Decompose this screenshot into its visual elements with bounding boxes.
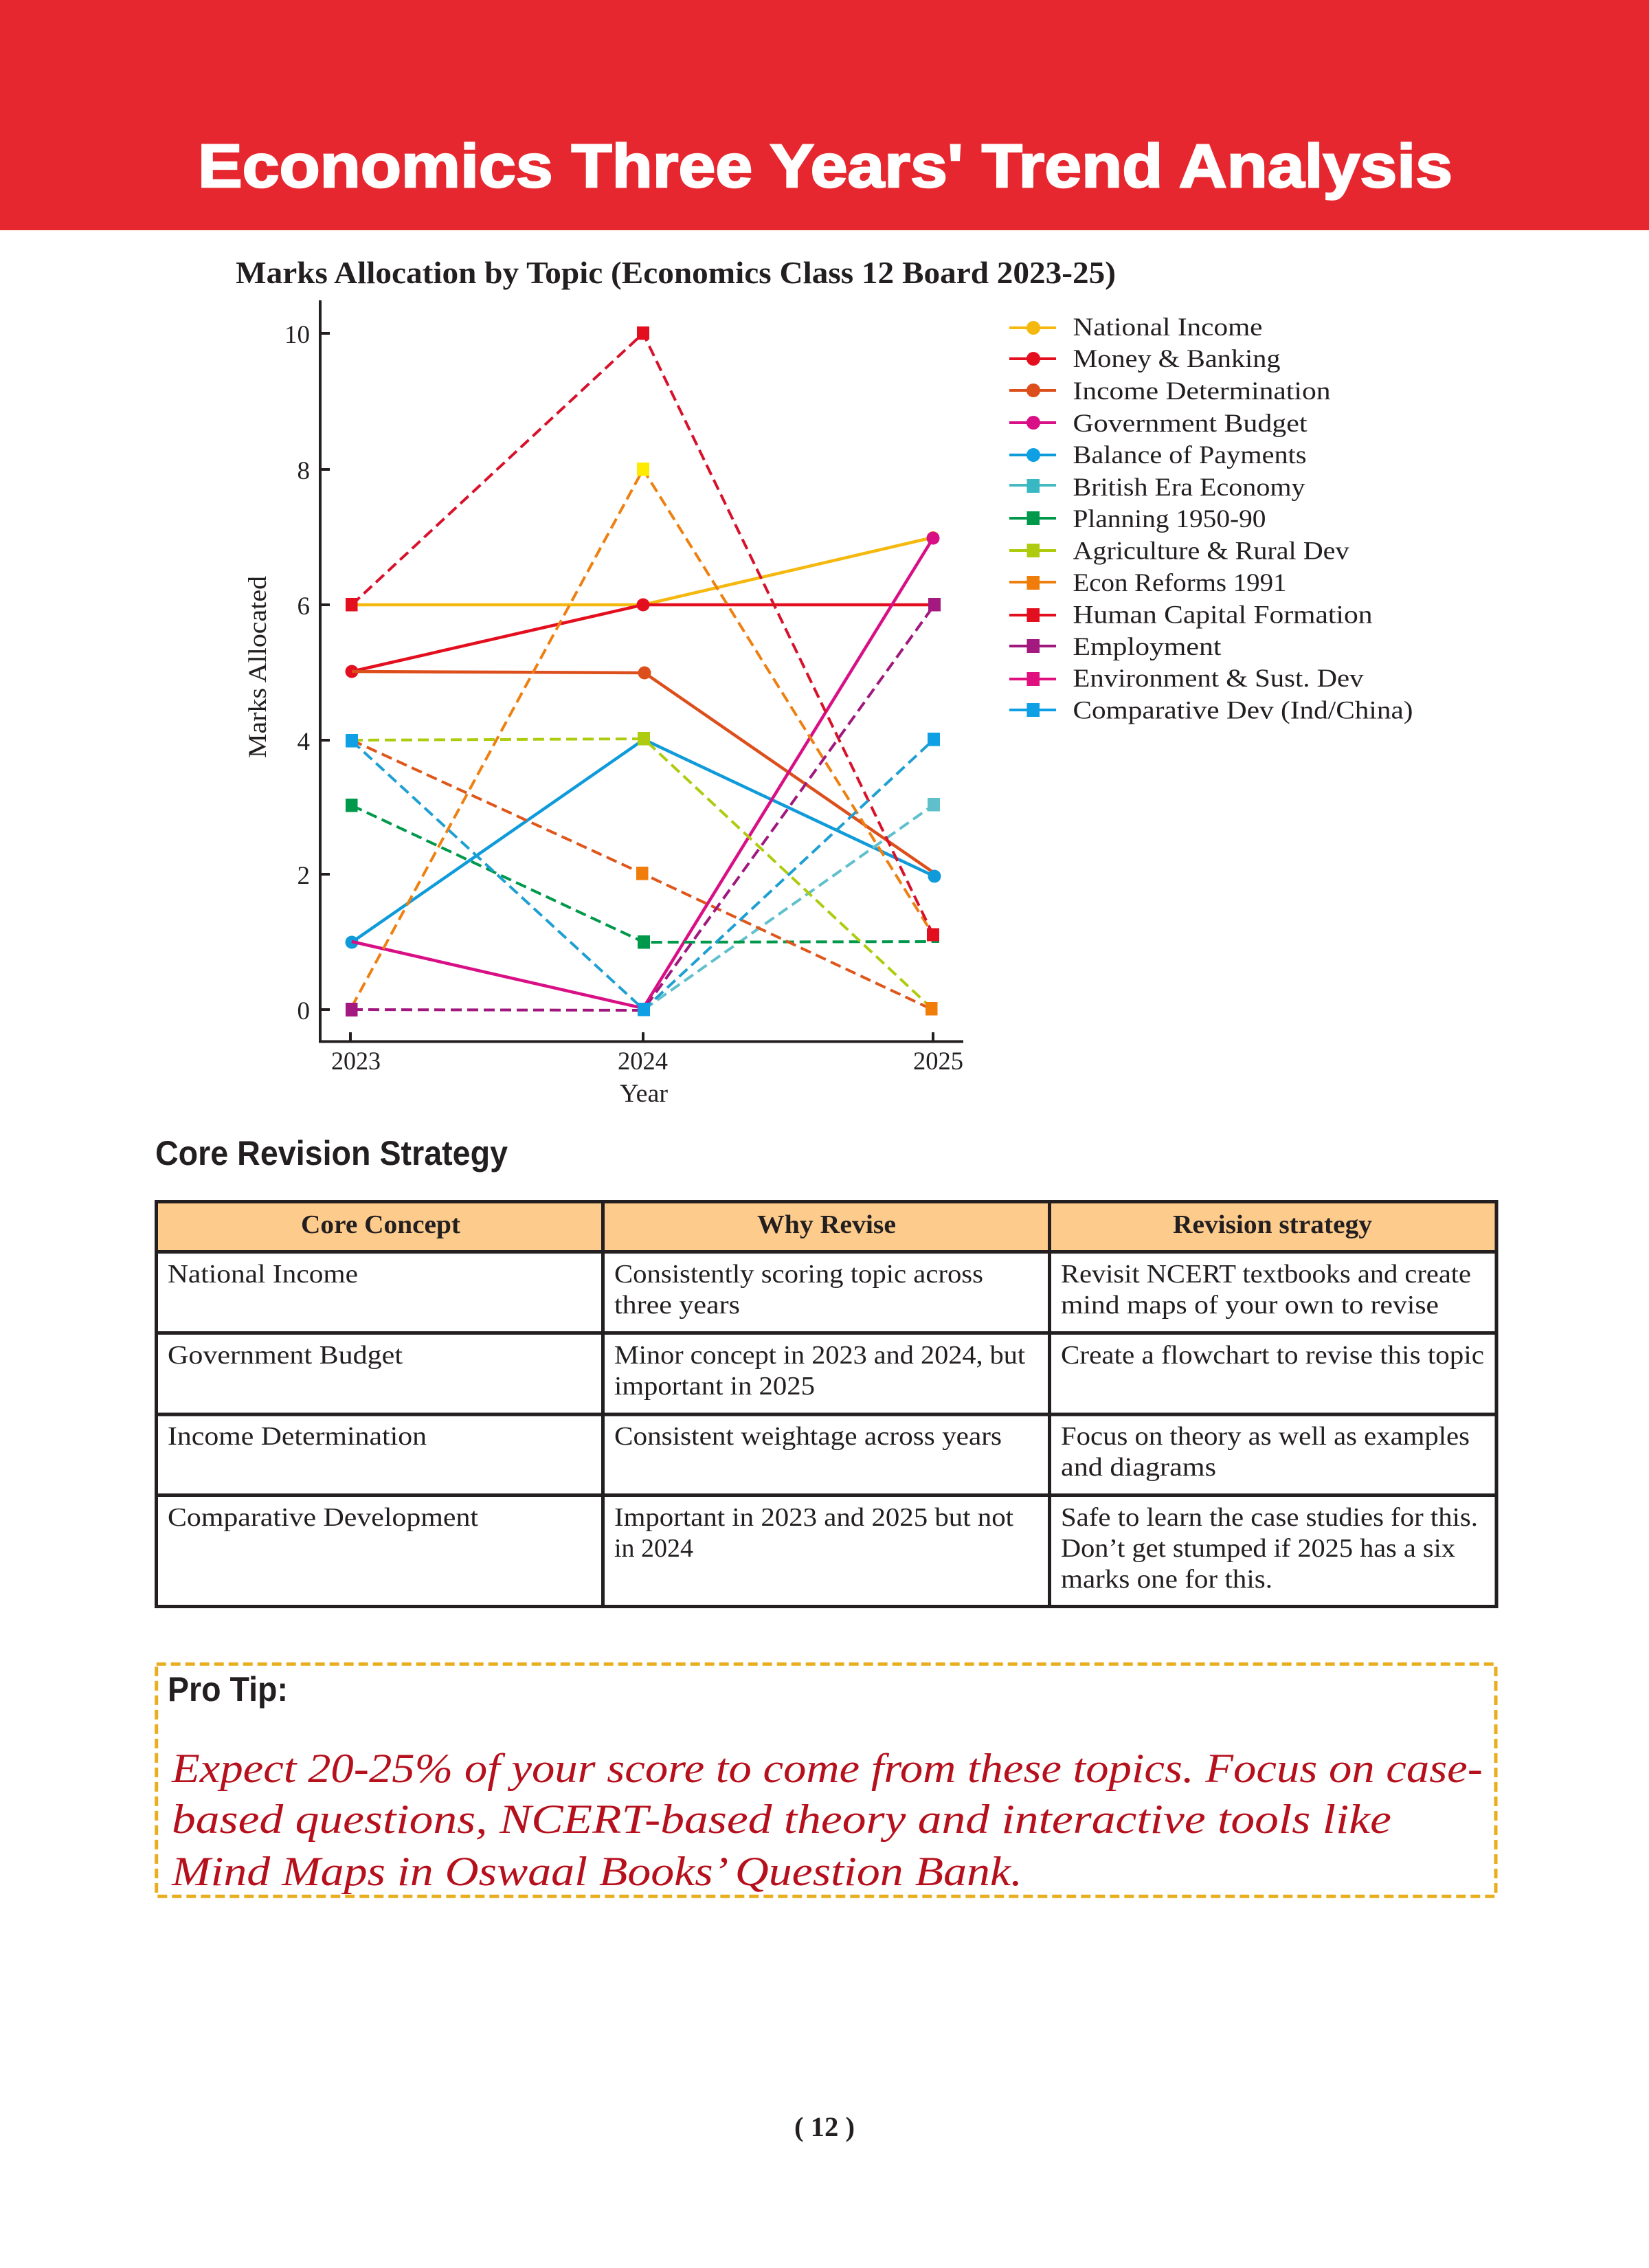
table row: National Income: National Income bbox=[168, 1260, 358, 1289]
legend item: Balance of Payments: Balance of Payments bbox=[1073, 441, 1307, 469]
table header row bbox=[157, 1201, 1496, 1252]
series: Human Capital Formation bbox=[346, 326, 939, 942]
legend item: British Era Economy: British Era Economy bbox=[1073, 474, 1305, 502]
table row: Comparative Development: Important in 2023 and 2025 but not bbox=[614, 1503, 1013, 1532]
table row: Government Budget bbox=[168, 1341, 1484, 1401]
legend item: Government Budget bbox=[1009, 410, 1308, 438]
legend item: Human Capital Formation: Human Capital Formation bbox=[1073, 601, 1373, 630]
pro tip heading: Pro Tip: bbox=[168, 1670, 288, 1709]
legend item: National Income bbox=[1009, 313, 1263, 342]
table row: Comparative Development: marks one for this. bbox=[1061, 1565, 1272, 1594]
series: British Era Economy bbox=[644, 798, 940, 1010]
legend item: Income Determination: Income Determination bbox=[1073, 377, 1330, 405]
series: Planning 1950-90 bbox=[346, 799, 939, 948]
legend item: National Income: National Income bbox=[1073, 313, 1263, 342]
table row: Government Budget: important in 2025 bbox=[614, 1372, 815, 1401]
table row: Comparative Development: in 2024 bbox=[614, 1534, 693, 1563]
series: Income Determination bbox=[352, 667, 940, 877]
table row: Income Determination: Consistent weightage across years bbox=[614, 1422, 1002, 1451]
pro tip body text bbox=[171, 1746, 1483, 1894]
x axis tick labels bbox=[331, 1047, 963, 1076]
legend item: Money and Banking: Money & Banking bbox=[1073, 345, 1281, 373]
series: Money and Banking bbox=[345, 598, 933, 678]
table row: National Income: Revisit NCERT textbooks and create bbox=[1061, 1260, 1471, 1289]
legend item: Employment bbox=[1009, 633, 1222, 661]
legend item: Econ Reforms 1991: Econ Reforms 1991 bbox=[1073, 569, 1286, 597]
legend item: Employment: Employment bbox=[1073, 633, 1222, 661]
chart axes bbox=[320, 300, 963, 1042]
legend item: Comparative Dev: Comparative Dev (Ind/China) bbox=[1073, 697, 1413, 724]
series: Environment and Sustainable Dev bbox=[352, 463, 933, 1007]
legend item: Environment and Sust. Dev: Environment & Sust. Dev bbox=[1073, 665, 1364, 693]
pro tip body text: Mind Maps in Oswaal Books’ Question Bank. bbox=[171, 1849, 1022, 1894]
table row: National Income: three years bbox=[614, 1291, 740, 1320]
table row: Comparative Development: Don’t get stumped if 2025 has a six bbox=[1061, 1534, 1455, 1563]
y axis tick labels bbox=[284, 321, 310, 1025]
chart legend bbox=[1009, 313, 1413, 724]
x axis title: Year bbox=[620, 1080, 668, 1108]
table row: Income Determination: Focus on theory as well as examples bbox=[1061, 1422, 1470, 1451]
series: Balance of Payments bbox=[345, 740, 941, 948]
series: Employment bbox=[346, 598, 941, 1016]
y axis tick labels: 2 bbox=[297, 862, 310, 890]
table row: Government Budget: Create a flowchart to revise this topic bbox=[1061, 1341, 1484, 1370]
section heading: Core Revision Strategy: Core Revision Strategy bbox=[155, 1134, 508, 1172]
series: Comparative Dev bbox=[346, 733, 940, 1016]
x axis tick labels: 2023 bbox=[331, 1047, 381, 1076]
table row: Government Budget: Minor concept in 2023 and 2024, but bbox=[614, 1341, 1025, 1370]
table row: Comparative Development: Comparative Development bbox=[168, 1503, 478, 1532]
chart title: Marks Allocation by Topic (Economics Class 12 Board 2023-25) bbox=[236, 255, 1116, 290]
header band with title bbox=[0, 0, 1649, 230]
line chart bbox=[244, 300, 963, 1108]
table row: Comparative Development bbox=[168, 1503, 1478, 1594]
pro tip body text: Expect 20-25% of your score to come from these topics. Focus on case- bbox=[171, 1746, 1483, 1791]
y axis tick labels: 8 bbox=[297, 457, 310, 485]
page number: ( 12 ) bbox=[794, 2111, 855, 2142]
table row: Income Determination bbox=[168, 1422, 1470, 1482]
y axis title: Marks Allocated bbox=[244, 575, 272, 758]
table row: Comparative Development: Safe to learn the case studies for this. bbox=[1061, 1503, 1478, 1532]
y axis tick labels: 4 bbox=[297, 728, 310, 756]
table row: Government Budget: Government Budget bbox=[168, 1341, 403, 1370]
x axis tick labels: 2025 bbox=[913, 1047, 963, 1076]
table row: Income Determination: and diagrams bbox=[1061, 1453, 1216, 1482]
series: Government Budget bbox=[352, 532, 940, 1008]
pro tip body text: based questions, NCERT-based theory and interactive tools like bbox=[172, 1797, 1391, 1842]
series: Agriculture and Rural Dev bbox=[352, 732, 932, 1009]
table header row: Revision strategy bbox=[1173, 1210, 1372, 1239]
header band with title: Economics Three Years' Trend Analysis bbox=[198, 131, 1452, 200]
legend item: Planning 1950-90: Planning 1950-90 bbox=[1073, 505, 1266, 533]
pro tip callout bbox=[157, 1664, 1496, 1896]
table row: National Income bbox=[168, 1260, 1471, 1320]
y axis tick labels: 0 bbox=[297, 997, 310, 1025]
table row: Income Determination: Income Determination bbox=[168, 1422, 427, 1451]
table row: National Income: mind maps of your own to revise bbox=[1061, 1291, 1439, 1320]
table row: National Income: Consistently scoring topic across bbox=[614, 1260, 983, 1289]
series: Econ Reforms 1991 bbox=[352, 740, 937, 1016]
x axis tick labels: 2024 bbox=[618, 1047, 668, 1076]
table header row: Why Revise bbox=[757, 1210, 896, 1239]
series: National Income bbox=[352, 531, 939, 605]
legend item: Agriculture and Rural Dev: Agriculture & Rural Dev bbox=[1073, 537, 1349, 565]
table header row: Core Concept bbox=[301, 1210, 460, 1239]
y axis tick labels: 10 bbox=[284, 321, 310, 349]
y axis tick labels: 6 bbox=[297, 592, 310, 621]
revision strategy table bbox=[157, 1201, 1496, 1607]
legend item: Government Budget: Government Budget bbox=[1073, 410, 1308, 438]
